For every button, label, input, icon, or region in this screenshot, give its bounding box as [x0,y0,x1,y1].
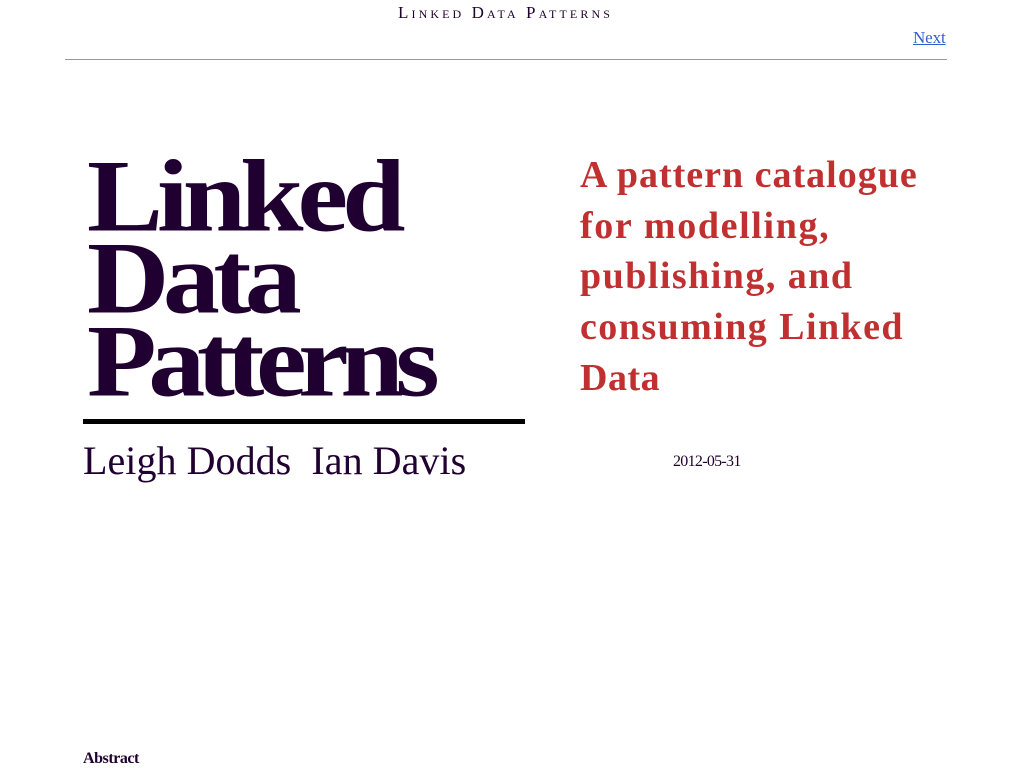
subtitle: publishing, and [580,255,853,297]
abstract heading: Abstract [83,750,139,767]
subtitle: consuming Linked [580,306,904,348]
publication date: 2012-05-31 [673,453,741,470]
book title: Linked [87,139,400,253]
subtitle: for modelling, [580,205,830,247]
header divider [65,59,947,60]
subtitle: Data [580,357,660,399]
authors: Leigh Dodds Ian Davis [83,438,466,483]
subtitle [580,154,918,399]
next link: Next [913,28,946,47]
running header: Linked Data Patterns [398,3,613,22]
book title [87,139,437,418]
subtitle: A pattern catalogue [580,154,918,196]
book title: Patterns [87,304,431,418]
book title: Data [87,221,295,335]
title rule [83,419,525,424]
